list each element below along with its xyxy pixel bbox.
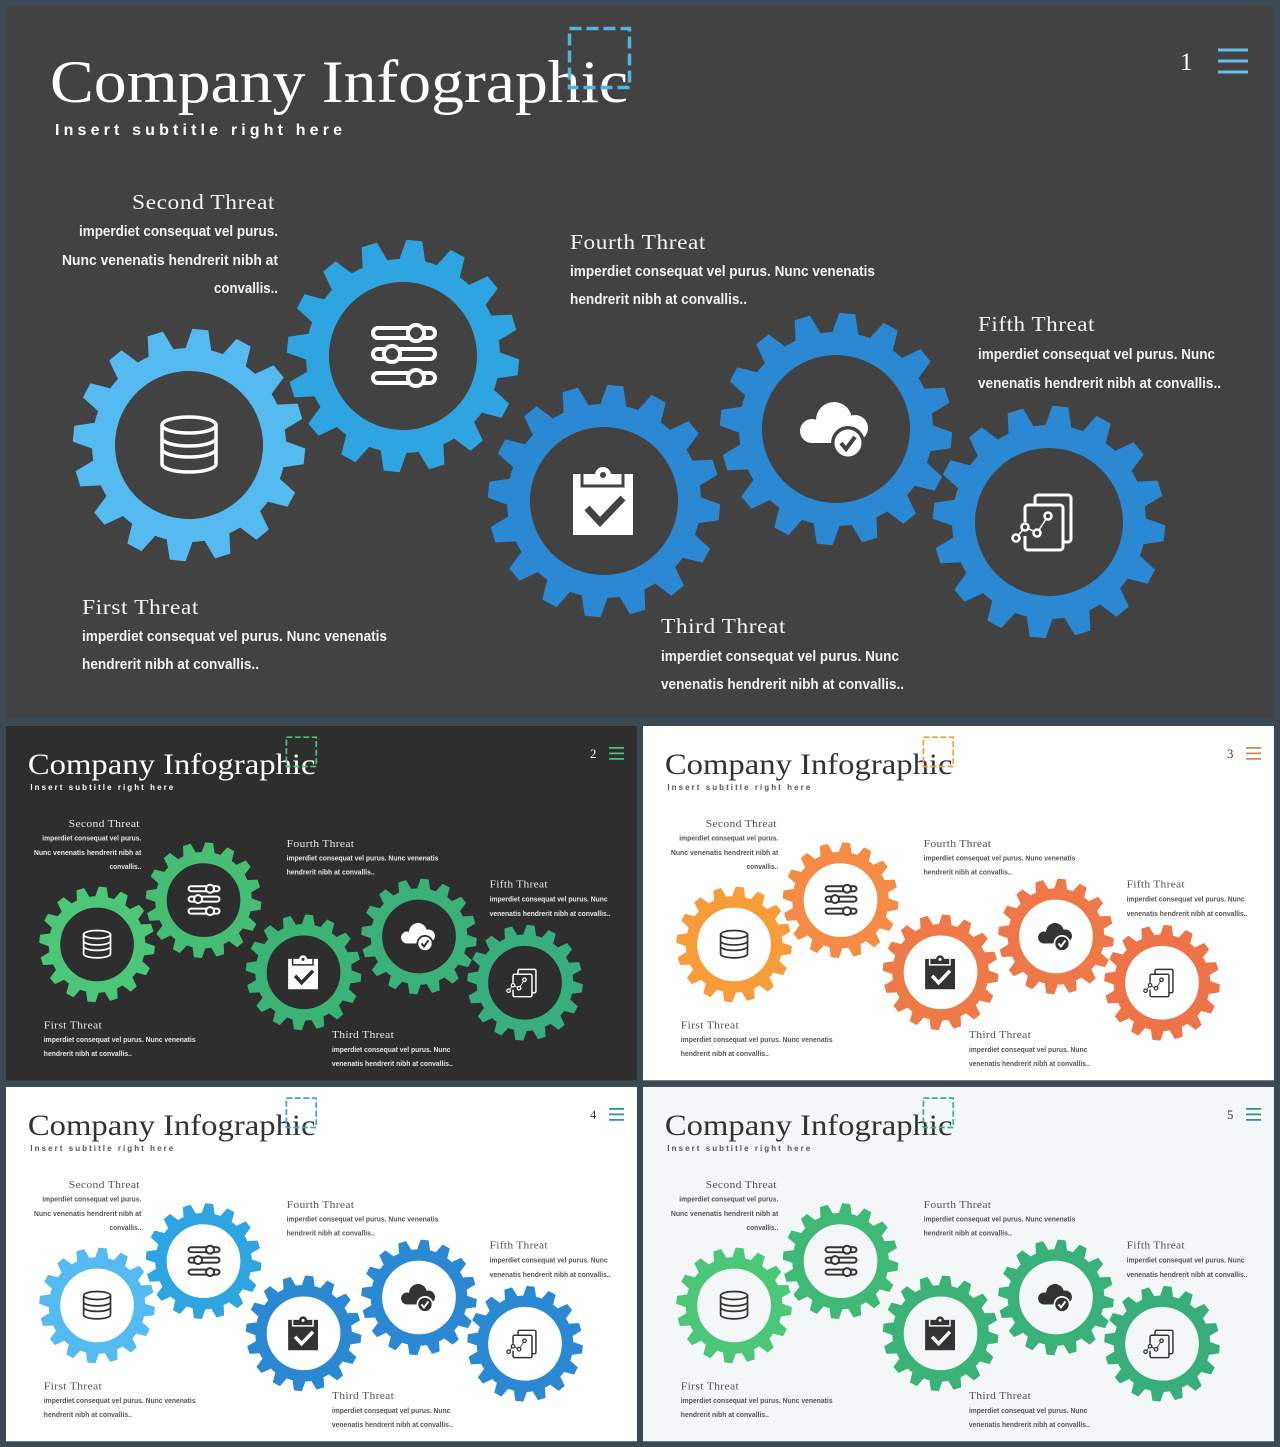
icon: menu <box>1218 50 1248 72</box>
gear: second threat with sliders icon <box>140 837 267 963</box>
text: second threat: Nunc venenatis hendrerit nibh at <box>34 1209 142 1218</box>
dashed accent square <box>923 1098 953 1128</box>
text: third threat <box>332 1030 453 1068</box>
text: fourth threat <box>924 1200 1075 1237</box>
dashed accent square <box>286 737 316 767</box>
gear: fifth threat with document graph icon <box>922 395 1176 649</box>
title: Company Infographic <box>665 1109 953 1142</box>
icon: menu <box>1246 748 1261 759</box>
text: third threat: imperdiet consequat vel purus. Nunc <box>969 1045 1087 1054</box>
text: second threat: Nunc venenatis hendrerit nibh at <box>671 1209 779 1218</box>
subtitle: Insert subtitle right here <box>667 1144 811 1153</box>
panel: white orange slide 3 <box>643 726 1274 1080</box>
text: fifth threat: Fifth Threat <box>1127 1241 1185 1252</box>
text: fifth threat: Fifth Threat <box>490 1241 548 1252</box>
text: fourth threat: imperdiet consequat vel purus. Nunc venenatis <box>287 853 438 862</box>
icon: menu <box>1246 1109 1261 1120</box>
text: second threat: convallis.. <box>109 862 141 871</box>
gear: fifth threat with document graph icon <box>462 920 588 1046</box>
text: fourth threat <box>287 1200 438 1237</box>
text: second threat: Second Threat <box>69 1180 140 1191</box>
text: second threat <box>34 819 142 871</box>
subtitle: Insert subtitle right here <box>30 1144 174 1153</box>
gear: fifth threat with document graph icon <box>1099 1281 1225 1407</box>
dashed accent square <box>923 737 953 767</box>
text: second threat: imperdiet consequat vel purus. <box>79 223 278 240</box>
text: fourth threat: imperdiet consequat vel purus. Nunc venenatis <box>287 1214 438 1223</box>
text: third threat: Third Threat <box>332 1391 394 1402</box>
text: fifth threat <box>490 880 611 918</box>
gear: fourth threat with cloud check icon <box>993 1234 1119 1361</box>
gear: third threat with clipboard icon <box>240 1270 367 1396</box>
text: fifth threat: Fifth Threat <box>978 312 1095 336</box>
text: fifth threat: venenatis hendrerit nibh at convallis.. <box>1127 909 1248 918</box>
icon: menu <box>609 1109 624 1120</box>
gear: second threat with sliders icon <box>276 229 530 483</box>
gear: fourth threat with cloud check icon <box>356 873 482 1000</box>
text: first threat <box>681 1021 833 1058</box>
text: second threat: imperdiet consequat vel purus. <box>679 1194 778 1203</box>
text: third threat: imperdiet consequat vel purus. Nunc <box>332 1406 450 1415</box>
panel: main dark slide 1 <box>6 6 1274 718</box>
text: second threat <box>671 819 779 871</box>
text: second threat <box>671 1180 779 1232</box>
gear: fourth threat with cloud check icon <box>356 1234 482 1361</box>
title: Company Infographic <box>665 748 953 781</box>
text: third threat: venenatis hendrerit nibh at convallis.. <box>332 1420 453 1429</box>
text: first threat: First Threat <box>82 595 199 619</box>
text: third threat <box>332 1391 453 1429</box>
gear: second threat with sliders icon <box>777 837 904 963</box>
text: first threat: hendrerit nibh at convallis.. <box>44 1410 132 1419</box>
text: fifth threat: venenatis hendrerit nibh at convallis.. <box>490 1270 611 1279</box>
text: second threat: Second Threat <box>706 1180 777 1191</box>
text: fifth threat: Fifth Threat <box>490 880 548 891</box>
page number: 4 <box>590 1108 597 1122</box>
dashed accent square <box>570 28 630 88</box>
gear: fourth threat with cloud check icon <box>993 873 1119 1000</box>
text: first threat: imperdiet consequat vel purus. Nunc venenatis <box>681 1396 833 1405</box>
text: first threat: hendrerit nibh at convallis.. <box>681 1410 769 1419</box>
subtitle: Insert subtitle right here <box>667 783 811 792</box>
text: fifth threat: venenatis hendrerit nibh at convallis.. <box>490 909 611 918</box>
text: third threat: Third Threat <box>969 1030 1031 1041</box>
text: fourth threat <box>287 839 438 876</box>
text: fifth threat: venenatis hendrerit nibh at convallis.. <box>1127 1270 1248 1279</box>
gear: third threat with clipboard icon <box>477 374 731 628</box>
text: second threat: Second Threat <box>132 190 275 214</box>
text: third threat: venenatis hendrerit nibh at convallis.. <box>332 1059 453 1068</box>
text: fourth threat: imperdiet consequat vel purus. Nunc venenatis <box>924 853 1075 862</box>
text: first threat: First Threat <box>44 1021 102 1032</box>
text: second threat: Nunc venenatis hendrerit nibh at <box>62 252 278 269</box>
gear: second threat with sliders icon <box>140 1198 267 1324</box>
text: third threat: imperdiet consequat vel purus. Nunc <box>661 648 899 665</box>
text: fourth threat: hendrerit nibh at convallis.. <box>287 867 375 876</box>
text: fifth threat: imperdiet consequat vel purus. Nunc <box>490 1256 608 1265</box>
text: first threat <box>681 1382 833 1419</box>
text: second threat: convallis.. <box>214 280 278 297</box>
text: third threat <box>969 1391 1090 1429</box>
gear: first threat with database icon <box>62 318 316 572</box>
subtitle: Insert subtitle right here <box>55 122 342 139</box>
text: first threat: hendrerit nibh at convallis.. <box>44 1049 132 1058</box>
text: fifth threat: Fifth Threat <box>1127 880 1185 891</box>
text: fourth threat: Fourth Threat <box>287 1200 354 1211</box>
text: fourth threat <box>924 839 1075 876</box>
text: second threat: convallis.. <box>746 862 778 871</box>
text: fifth threat: imperdiet consequat vel purus. Nunc <box>1127 1256 1245 1265</box>
text: second threat <box>34 1180 142 1232</box>
text: second threat: Nunc venenatis hendrerit nibh at <box>671 848 779 857</box>
text: first threat: imperdiet consequat vel purus. Nunc venenatis <box>44 1396 196 1405</box>
text: fourth threat: hendrerit nibh at convallis.. <box>924 867 1012 876</box>
text: first threat: imperdiet consequat vel purus. Nunc venenatis <box>44 1035 196 1044</box>
text: third threat: venenatis hendrerit nibh at convallis.. <box>661 676 904 693</box>
text: first threat: hendrerit nibh at convallis.. <box>681 1049 769 1058</box>
text: third threat: imperdiet consequat vel purus. Nunc <box>332 1045 450 1054</box>
panel: dark green slide 2 <box>6 726 637 1080</box>
gear: first threat with database icon <box>34 881 160 1008</box>
text: first threat <box>82 595 387 673</box>
text: first threat <box>44 1021 196 1058</box>
text: third threat <box>661 614 904 693</box>
text: fourth threat: imperdiet consequat vel purus. Nunc venenatis <box>924 1214 1075 1223</box>
text: fourth threat: hendrerit nibh at convallis.. <box>287 1228 375 1237</box>
gear: fourth threat with cloud check icon <box>709 302 963 556</box>
text: third threat: Third Threat <box>969 1391 1031 1402</box>
gear: third threat with clipboard icon <box>877 1270 1004 1396</box>
text: fifth threat: imperdiet consequat vel purus. Nunc <box>490 895 608 904</box>
text: third threat: imperdiet consequat vel purus. Nunc <box>969 1406 1087 1415</box>
text: second threat: Second Threat <box>69 819 140 830</box>
text: second threat: imperdiet consequat vel purus. <box>679 833 778 842</box>
panel: pale green slide 5 <box>643 1087 1274 1441</box>
panel: white blue slide 4 <box>6 1087 637 1441</box>
page number: 2 <box>590 747 596 761</box>
text: fifth threat <box>978 312 1221 392</box>
page number: 1 <box>1180 49 1192 76</box>
text: third threat: venenatis hendrerit nibh at convallis.. <box>969 1059 1090 1068</box>
text: fifth threat: imperdiet consequat vel purus. Nunc <box>1127 895 1245 904</box>
text: first threat: imperdiet consequat vel purus. Nunc venenatis <box>82 628 387 645</box>
title: Company Infographic <box>28 1109 316 1142</box>
title: Company Infographic <box>50 49 628 115</box>
text: second threat: imperdiet consequat vel purus. <box>42 833 141 842</box>
page number: 3 <box>1227 747 1233 761</box>
page number: 5 <box>1227 1108 1233 1122</box>
gear: third threat with clipboard icon <box>240 909 367 1035</box>
text: first threat <box>44 1382 196 1419</box>
text: fourth threat: imperdiet consequat vel purus. Nunc venenatis <box>570 263 875 280</box>
text: fourth threat: hendrerit nibh at convallis.. <box>924 1228 1012 1237</box>
gear: fifth threat with document graph icon <box>1099 920 1225 1046</box>
text: second threat <box>62 190 278 297</box>
gear: second threat with sliders icon <box>777 1198 904 1324</box>
text: fourth threat: hendrerit nibh at convallis.. <box>570 291 747 308</box>
text: fourth threat: Fourth Threat <box>287 839 354 850</box>
text: third threat <box>969 1030 1090 1068</box>
text: fourth threat: Fourth Threat <box>570 230 706 254</box>
gear: first threat with database icon <box>34 1242 160 1369</box>
text: first threat: imperdiet consequat vel purus. Nunc venenatis <box>681 1035 833 1044</box>
gear: third threat with clipboard icon <box>877 909 1004 1035</box>
dashed accent square <box>286 1098 316 1128</box>
gear: first threat with database icon <box>671 1242 797 1369</box>
title: Company Infographic <box>28 748 316 781</box>
text: third threat: Third Threat <box>332 1030 394 1041</box>
text: second threat: imperdiet consequat vel purus. <box>42 1194 141 1203</box>
text: fourth threat: Fourth Threat <box>924 839 991 850</box>
text: fourth threat <box>570 230 875 308</box>
text: fifth threat: imperdiet consequat vel purus. Nunc <box>978 346 1215 363</box>
text: fifth threat <box>490 1241 611 1279</box>
text: first threat: First Threat <box>44 1382 102 1393</box>
text: first threat: First Threat <box>681 1382 739 1393</box>
text: fourth threat: Fourth Threat <box>924 1200 991 1211</box>
text: third threat: venenatis hendrerit nibh at convallis.. <box>969 1420 1090 1429</box>
text: second threat: Nunc venenatis hendrerit nibh at <box>34 848 142 857</box>
text: first threat: First Threat <box>681 1021 739 1032</box>
text: fifth threat <box>1127 1241 1248 1279</box>
text: fifth threat <box>1127 880 1248 918</box>
icon: menu <box>609 748 624 759</box>
text: third threat: Third Threat <box>661 614 786 638</box>
gear: first threat with database icon <box>671 881 797 1008</box>
text: second threat: convallis.. <box>746 1223 778 1232</box>
gear: fifth threat with document graph icon <box>462 1281 588 1407</box>
text: second threat: convallis.. <box>109 1223 141 1232</box>
text: fifth threat: venenatis hendrerit nibh at convallis.. <box>978 375 1221 392</box>
text: second threat: Second Threat <box>706 819 777 830</box>
subtitle: Insert subtitle right here <box>30 783 174 792</box>
text: first threat: hendrerit nibh at convallis.. <box>82 656 259 673</box>
